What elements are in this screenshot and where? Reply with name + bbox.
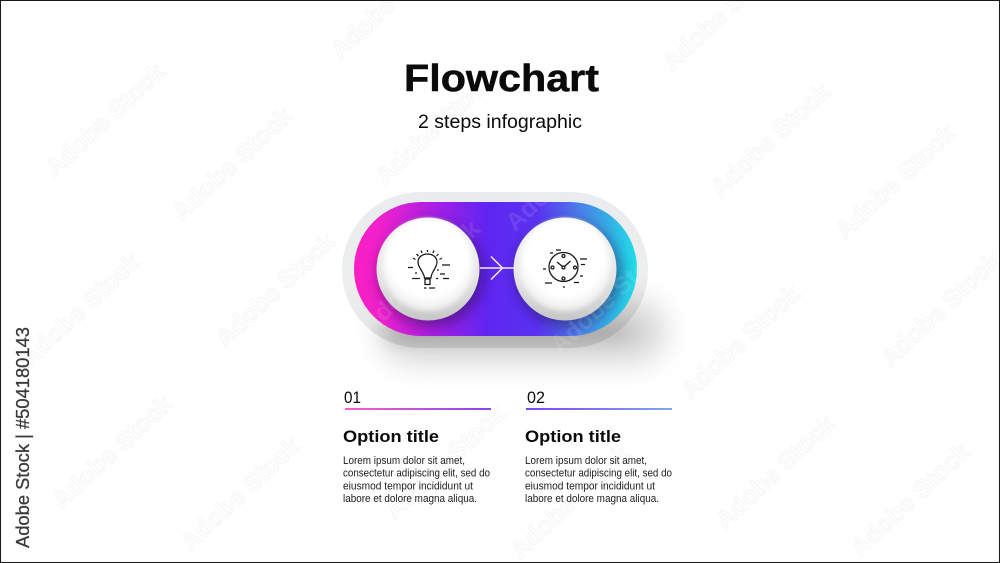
step 2 body: eiusmod tempor incididunt ut xyxy=(525,480,655,492)
watermark pattern: Adobe Stock xyxy=(505,440,636,563)
step 2 heading: Option title xyxy=(525,427,621,446)
flowchart toggle graphic xyxy=(342,112,676,362)
step number 01: 01 xyxy=(344,388,361,407)
step 1 knob xyxy=(376,218,484,327)
step 2 underline xyxy=(526,408,672,410)
stock credit vertical text: Adobe Stock | #504180143 xyxy=(13,327,33,548)
title: Flowchart xyxy=(404,58,599,100)
icon: clock xyxy=(543,250,587,287)
watermark pattern: Adobe Stock xyxy=(210,228,341,352)
step 2 knob xyxy=(514,218,621,327)
step 1 body: Lorem ipsum dolor sit amet, xyxy=(343,455,465,467)
watermark pattern: Adobe Stock xyxy=(705,78,836,202)
watermark pattern: Adobe Stock xyxy=(675,280,806,404)
watermark over pill: Adobe Stock xyxy=(545,235,676,359)
outer grey pill xyxy=(342,192,648,348)
step 2 text block xyxy=(525,388,672,505)
watermark pattern: Adobe Stock xyxy=(15,248,146,372)
watermark pattern: Adobe Stock xyxy=(167,102,298,226)
watermark over pill xyxy=(355,112,676,359)
drop shadow xyxy=(380,300,665,362)
watermark pattern: Adobe Stock xyxy=(845,438,976,562)
pill bottom shade xyxy=(385,326,630,340)
watermark pattern: Adobe Stock xyxy=(830,120,961,244)
step 2 body: Lorem ipsum dolor sit amet, xyxy=(525,455,647,467)
watermark over pill: Adobe Stock xyxy=(500,112,631,236)
watermark pattern: Adobe Stock xyxy=(380,400,511,524)
step 2 body: labore et dolore magna aliqua. xyxy=(525,493,659,505)
watermark pattern: Adobe Stock xyxy=(370,66,501,190)
step 1 text block xyxy=(343,388,491,505)
step 2 body xyxy=(525,455,672,505)
watermark pattern: Adobe Stock xyxy=(40,58,171,182)
subtitle: 2 steps infographic xyxy=(418,111,582,133)
step 1 underline xyxy=(345,408,491,410)
watermark pattern: Adobe Stock xyxy=(47,390,178,514)
step 1 body: consectetur adipiscing elit, sed do xyxy=(343,468,490,480)
step 1 body xyxy=(343,455,490,505)
arrow xyxy=(480,256,514,280)
gradient pill xyxy=(354,202,637,336)
watermark pattern: Adobe Stock xyxy=(175,432,306,556)
step number 02: 02 xyxy=(527,388,545,407)
watermark over pill: Adobe Stock xyxy=(355,215,486,339)
watermark pattern: Adobe Stock xyxy=(710,410,841,534)
step 1 heading: Option title xyxy=(343,427,439,446)
icon: light bulb xyxy=(408,250,450,288)
step 2 body: consectetur adipiscing elit, sed do xyxy=(525,468,672,480)
step 1 body: labore et dolore magna aliqua. xyxy=(343,493,477,505)
step 1 body: eiusmod tempor incididunt ut xyxy=(343,480,473,492)
